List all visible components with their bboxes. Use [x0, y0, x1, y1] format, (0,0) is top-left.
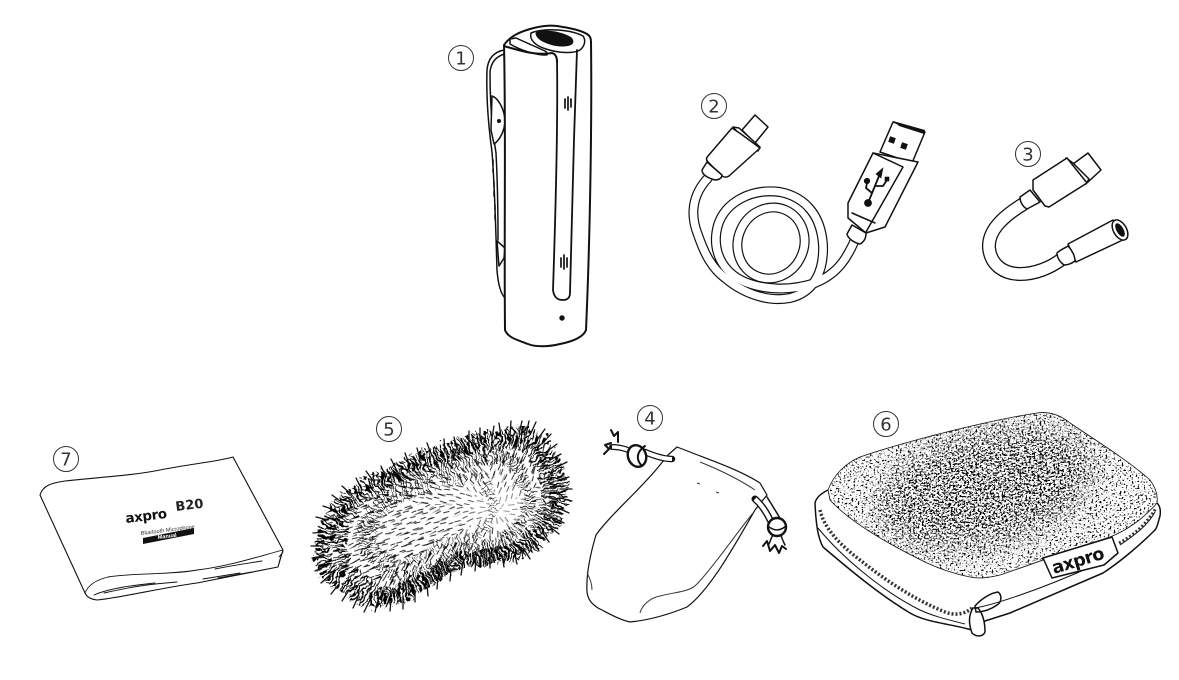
pouch stitches — [697, 462, 755, 493]
case brand tag — [1043, 537, 1118, 579]
number 7: 7 — [60, 450, 72, 470]
manual subtitle: Bluetooth Microphone — [141, 524, 195, 537]
item 2: usb cable — [693, 115, 925, 299]
number 1: 1 — [455, 48, 467, 70]
icon: microphone body — [504, 26, 591, 346]
item 5: furry windshield — [310, 420, 573, 613]
pouch right cord and knot — [755, 497, 786, 553]
cable coil — [693, 178, 855, 299]
pouch inner fold — [587, 513, 753, 613]
microphone front groove — [553, 50, 577, 300]
manual badge — [143, 528, 194, 544]
fur inner hair rings — [339, 442, 551, 593]
fur body texture — [311, 424, 572, 612]
manual logo: axpro — [125, 506, 168, 527]
number 4: 4 — [644, 408, 656, 430]
case brand tag: axpro — [1050, 544, 1107, 579]
number 6 — [874, 412, 898, 436]
case lid — [828, 413, 1157, 578]
number 4 — [638, 406, 662, 430]
case fabric texture — [828, 412, 1157, 578]
adapter cable loop — [989, 203, 1062, 274]
case shell — [815, 490, 1160, 630]
usb-c connector — [702, 115, 768, 180]
manual model name: B20 — [175, 497, 204, 515]
fur rim hairs — [323, 435, 561, 600]
number 3: 3 — [1022, 144, 1034, 166]
fur spikes — [311, 421, 572, 612]
icon: belt clip — [487, 50, 505, 298]
manual fold lines — [85, 550, 283, 595]
microphone top slot — [504, 30, 585, 62]
number 5: 5 — [383, 420, 395, 440]
case zipper pull — [970, 592, 1001, 636]
case zipper — [818, 508, 1156, 624]
item 4: drawstring pouch — [587, 430, 786, 622]
manual pages — [40, 457, 283, 600]
number 5 — [376, 416, 402, 442]
number 2: 2 — [708, 96, 720, 118]
cable inner rings — [726, 196, 816, 290]
usb-c connector — [1020, 153, 1101, 209]
number 3 — [1016, 142, 1040, 166]
number 6: 6 — [880, 414, 892, 436]
number 7 — [54, 446, 78, 472]
pouch left cord and knot — [604, 430, 672, 469]
item 1: bluetooth microphone — [487, 26, 591, 346]
item 7: user manual — [40, 457, 283, 600]
number 1 — [448, 46, 474, 70]
pouch bag — [587, 447, 767, 622]
microphone sound holes — [559, 97, 571, 321]
manual badge: Manual — [158, 533, 178, 541]
headphone jack — [1057, 217, 1131, 265]
item 6: carrying case — [815, 405, 1165, 636]
item 3: adapter cable — [989, 153, 1131, 274]
number 2 — [702, 94, 726, 118]
usb-a connector — [847, 121, 925, 244]
